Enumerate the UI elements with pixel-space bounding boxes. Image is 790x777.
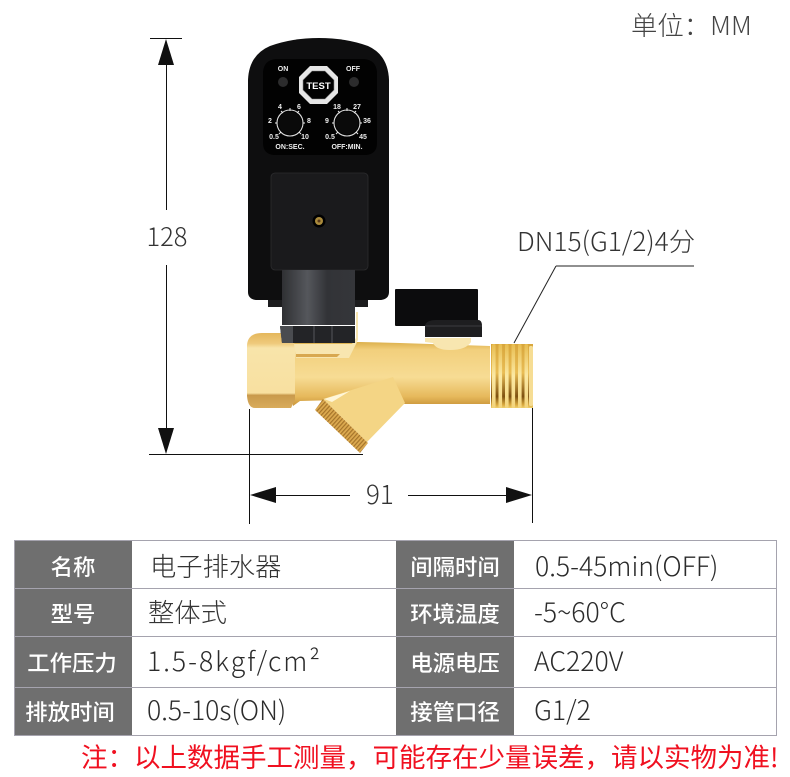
dimension: width 91: 91 — [366, 475, 394, 512]
drain valve product illustration — [247, 38, 533, 453]
on-time dial: 4 — [278, 104, 282, 111]
on-time dial: 8 — [307, 118, 311, 125]
row 4 — [25, 689, 591, 728]
on-time dial: 2 — [268, 118, 272, 125]
off-time dial: 45 — [359, 134, 367, 141]
row 2: -5~60°C — [534, 591, 626, 630]
row 4: 0.5-10s(ON) — [147, 689, 286, 728]
unit label: 单位：MM — [631, 4, 752, 43]
solenoid connector with screw — [271, 173, 368, 270]
off-time dial: 36 — [363, 118, 371, 125]
off-time dial: 27 — [353, 104, 361, 111]
row 3 — [27, 640, 624, 679]
coil cylinder and nut — [280, 270, 355, 343]
row 3: 电源电压 — [410, 646, 500, 678]
specification table — [14, 540, 777, 736]
timer control panel — [263, 59, 377, 155]
row 4: 接管口径 — [410, 695, 500, 727]
ball valve brass stem — [425, 338, 471, 350]
off-time dial: 0.5 — [325, 134, 335, 141]
black timer housing — [248, 38, 389, 307]
timer control panel: ON — [278, 66, 288, 73]
test button: TEST — [306, 81, 331, 92]
row 1: 名称 — [51, 550, 95, 582]
footnote: 注：以上数据手工测量，可能存在少量误差，请以实物为准! — [81, 736, 779, 775]
timer control panel: OFF — [346, 66, 361, 73]
row 1: 间隔时间 — [410, 550, 500, 582]
off-time dial: 18 — [333, 104, 341, 111]
off-time dial: OFF:MIN. — [331, 144, 363, 151]
row 4: G1/2 — [534, 689, 591, 728]
dimension: width 91 — [250, 407, 532, 524]
row 3: AC220V — [534, 640, 624, 679]
row 2 — [51, 591, 626, 630]
ball valve handle — [395, 289, 482, 337]
strainer branch — [323, 377, 405, 442]
callout: pipe thread size: DN15(G1/2)4分 — [517, 220, 695, 259]
row 3: 1.5-8kgf/cm² — [147, 640, 322, 679]
on-time dial: ON:SEC. — [275, 144, 305, 151]
row 3: 工作压力 — [27, 646, 117, 678]
row 4: 排放时间 — [25, 695, 115, 727]
dimension: height 128: 128 — [146, 217, 187, 254]
off-time dial: 9 — [325, 118, 329, 125]
on-time dial: 10 — [301, 134, 309, 141]
threaded outlet — [491, 344, 533, 408]
brass valve body — [247, 312, 533, 453]
callout: pipe thread size — [514, 220, 695, 343]
on-time dial: 6 — [297, 104, 301, 111]
on-time dial: 0.5 — [269, 134, 279, 141]
row 2: 环境温度 — [410, 597, 500, 629]
on-time dial — [268, 104, 311, 151]
row 2: 整体式 — [148, 591, 227, 630]
row 1: 0.5-45min(OFF) — [535, 545, 718, 584]
row 1: 电子排水器 — [150, 545, 281, 584]
off-time dial — [325, 104, 371, 151]
row 2: 型号 — [51, 597, 95, 629]
row 1 — [51, 545, 718, 584]
dimension: height 128 — [146, 38, 363, 454]
